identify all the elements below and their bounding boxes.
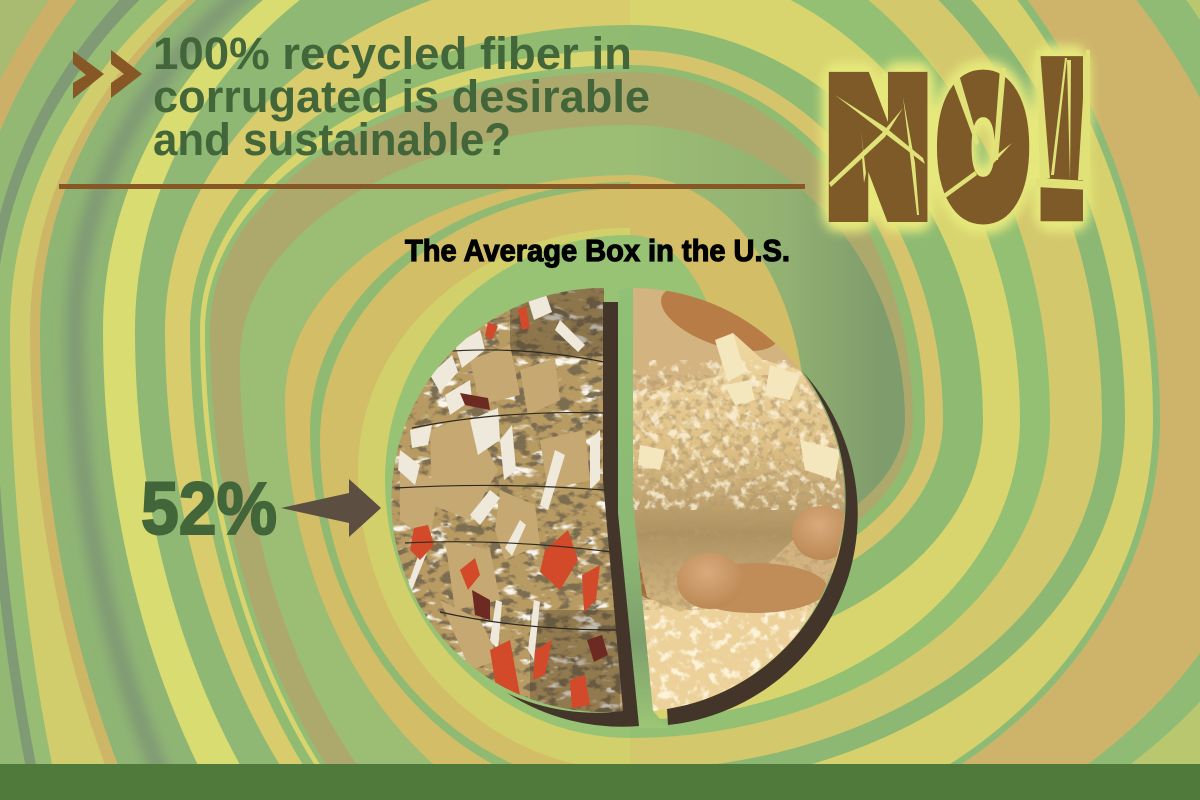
divider [59, 184, 805, 189]
heading: 100% recycled fiber in [153, 28, 632, 79]
NO! graphic: O [939, 50, 1027, 251]
pie gap [618, 288, 668, 728]
bottom bar [0, 764, 1200, 800]
heading: corrugated is desirable [153, 71, 650, 122]
right slice shadow [667, 372, 858, 725]
chevron icon [73, 50, 142, 99]
left slice shadow [507, 302, 639, 727]
cracks [829, 50, 1090, 215]
heading: and sustainable? [153, 114, 511, 165]
NO! graphic [826, 31, 1093, 253]
NO! graphic: ! [1031, 31, 1093, 253]
NO! graphic: O [939, 50, 1027, 251]
NO! graphic: N [826, 49, 930, 251]
NO! graphic: ! [1031, 31, 1093, 253]
pie chart [390, 271, 858, 727]
left slice: recycled bale photo [390, 286, 630, 716]
52% label: 52% [141, 467, 277, 550]
right slice: wood fiber photo [633, 288, 844, 711]
NO! graphic: N [826, 49, 930, 251]
heading [153, 28, 650, 165]
chart title: The Average Box in the U.S. [405, 233, 790, 268]
arrow [281, 479, 381, 537]
